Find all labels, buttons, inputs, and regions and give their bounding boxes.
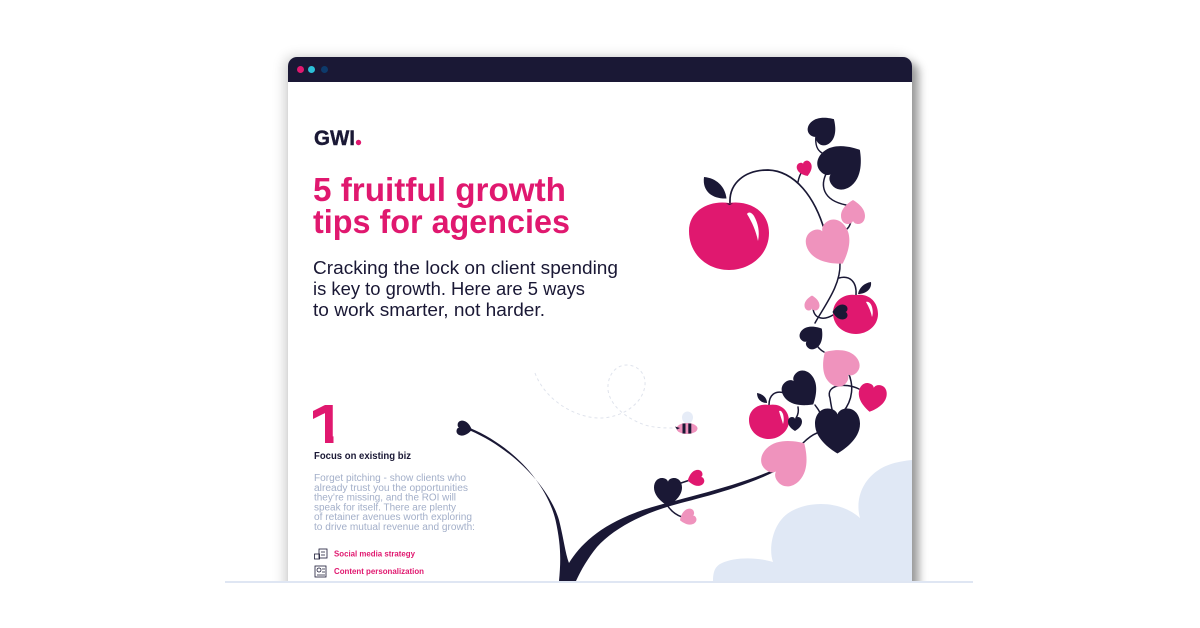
list item: content personalization: Content personalization [334,567,424,576]
window control dots [297,66,328,73]
icon: social media [314,549,327,559]
list item: content personalization [315,566,424,577]
title: 5 fruitful growth [313,171,566,208]
infographic artwork and text [297,66,912,581]
logo: GWI [314,127,355,150]
subtitle: to work smarter, not harder. [313,300,545,320]
bee flight path [535,365,675,428]
thin vines [667,136,859,517]
step body text: they’re missing, and the ROI will [314,492,456,504]
heart on left branch tip [456,420,473,437]
icon: content [315,566,326,577]
step body text: speak for itself. There are plenty [314,502,456,514]
icon: bee [675,412,698,434]
list item: social media strategy: Social media strategy [334,550,416,558]
window title bar [288,57,912,82]
hearts on vines [654,109,888,528]
tree trunk and branches [456,420,774,581]
step body text: already trust you the opportunities [314,483,468,494]
step body text: of retainer avenues worth exploring [314,512,472,523]
apple: large [689,177,769,270]
step number: 1 [310,393,341,456]
cloud [713,460,912,581]
ground line [225,581,973,582]
step body text: to drive mutual revenue and growth: [314,522,475,533]
step heading: Focus on existing biz [314,451,411,462]
subtitle: Cracking the lock on client spending [313,258,618,278]
apple: medium [833,282,878,334]
title [313,171,570,240]
subtitle: is key to growth. Here are 5 ways [313,279,585,299]
subtitle [313,258,618,320]
step body text [314,473,475,533]
step body text: Forget pitching - show clients who [314,473,466,484]
apple: small [749,393,789,439]
title: tips for agencies [313,203,570,240]
